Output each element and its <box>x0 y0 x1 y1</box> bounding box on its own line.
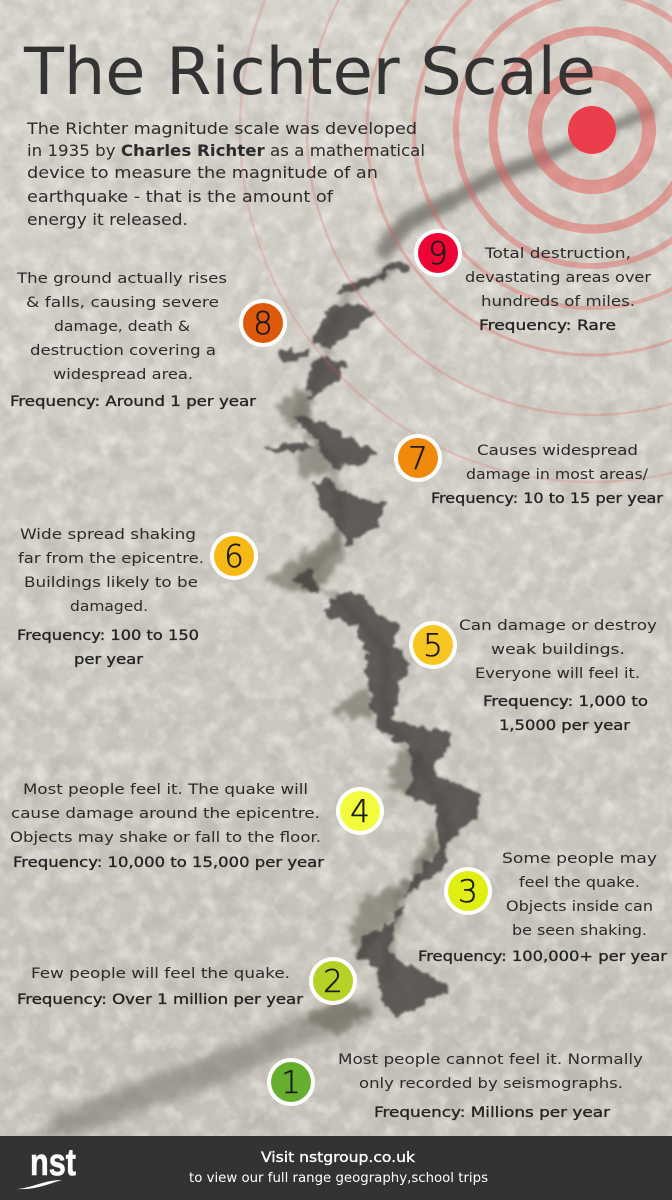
logo: nst: nst <box>30 1142 76 1184</box>
description 7: Frequency: 10 to 15 per year <box>431 491 663 507</box>
footer text <box>189 1150 488 1186</box>
badge 7 <box>394 434 442 482</box>
logo: nst <box>17 1142 76 1189</box>
description 4: cause damage around the epicentre. <box>11 806 320 822</box>
description 5 <box>459 618 657 734</box>
description 4: Most people feel it. The quake will <box>23 782 308 798</box>
footer bar <box>0 1136 672 1200</box>
description 5: weak buildings. <box>491 642 625 658</box>
badge 4: 4 <box>350 794 370 830</box>
description 9: devastating areas over <box>465 270 651 286</box>
badge 3 <box>444 867 492 915</box>
description 7: damage in most areas/ <box>466 467 648 483</box>
magnitude 1 <box>267 1052 643 1121</box>
description 5: Frequency: 1,000 to <box>483 694 648 710</box>
badge 8: 8 <box>253 306 273 342</box>
description 4: Frequency: 10,000 to 15,000 per year <box>13 855 324 871</box>
magnitude 4 <box>10 782 384 871</box>
crack in the concrete <box>36 112 650 1136</box>
description 8: widespread area. <box>53 367 193 383</box>
description 8: Frequency: Around 1 per year <box>10 394 256 410</box>
description 2: Few people will feel the quake. <box>31 966 290 982</box>
description 1: only recorded by seismographs. <box>359 1076 623 1092</box>
description 4: Objects may shake or fall to the floor. <box>10 830 321 846</box>
description 2: Frequency: Over 1 million per year <box>17 992 303 1008</box>
magnitude 8 <box>10 271 287 410</box>
icon: epicentre dot <box>568 106 616 154</box>
description 6: Wide spread shaking <box>20 527 196 543</box>
badge 9 <box>414 229 462 277</box>
description 9: Total destruction, <box>484 246 631 262</box>
description 5: Can damage or destroy <box>459 618 657 634</box>
description 8: & falls, causing severe <box>26 295 219 311</box>
magnitude 9 <box>414 229 651 334</box>
title: The Richter Scale <box>23 35 596 110</box>
badge 7: 7 <box>408 441 428 477</box>
intro text: earthquake - that is the amount of <box>27 187 333 206</box>
description 8 <box>10 271 256 410</box>
badge 5: 5 <box>423 628 443 664</box>
description 9: hundreds of miles. <box>481 294 635 310</box>
badge 6 <box>210 532 258 580</box>
description 3: feel the quake. <box>519 875 640 891</box>
description 3: Frequency: 100,000+ per year <box>418 949 667 965</box>
description 1 <box>338 1052 643 1121</box>
magnitude 7 <box>394 434 663 507</box>
intro text: device to measure the magnitude of an <box>27 163 378 182</box>
magnitude 5 <box>409 618 657 734</box>
intro text <box>26 119 425 229</box>
description 6: far from the epicentre. <box>18 551 204 567</box>
description 9: Frequency: Rare <box>479 318 616 334</box>
intro text: in 1935 by Charles Richter as a mathematical <box>27 141 425 160</box>
footer text: to view our full range geography,school trips <box>189 1171 488 1186</box>
magnitude 3 <box>418 851 667 965</box>
description 1: Most people cannot feel it. Normally <box>338 1052 643 1068</box>
badge 6: 6 <box>224 539 244 575</box>
description 3: Some people may <box>502 851 657 867</box>
description 3: Objects inside can <box>506 899 653 915</box>
description 6 <box>17 527 204 668</box>
description 6: Buildings likely to be <box>24 575 198 591</box>
badge 8 <box>239 299 287 347</box>
description 6: damaged. <box>70 599 148 615</box>
intro text: The Richter magnitude scale was developed <box>26 119 417 138</box>
bottom-left faded crack <box>36 996 380 1136</box>
badge 3: 3 <box>458 874 478 910</box>
dark crack shapes <box>266 262 480 1017</box>
magnitude 6 <box>17 527 258 668</box>
intro text: energy it released. <box>27 210 188 229</box>
top-right blurred streak <box>385 112 650 250</box>
description 2 <box>17 966 303 1008</box>
badge 5 <box>409 621 457 669</box>
badge 4 <box>336 787 384 835</box>
description 8: damage, death & <box>54 319 190 335</box>
description 5: Everyone will feel it. <box>475 666 640 682</box>
description 7 <box>431 443 663 507</box>
description 8: destruction covering a <box>30 343 216 359</box>
badge 1: 1 <box>281 1065 301 1101</box>
footer text: Visit nstgroup.co.uk <box>261 1150 416 1166</box>
badge 9: 9 <box>428 236 448 272</box>
description 6: per year <box>74 652 143 668</box>
magnitude 2 <box>17 957 357 1008</box>
description 1: Frequency: Millions per year <box>374 1105 610 1121</box>
description 3: be seen shaking. <box>512 923 647 939</box>
description 9 <box>465 246 651 334</box>
description 3 <box>418 851 667 965</box>
badge 2: 2 <box>323 964 343 1000</box>
epicentre rings <box>240 0 672 482</box>
description 4 <box>10 782 324 871</box>
badge 1 <box>267 1058 315 1106</box>
description 8: The ground actually rises <box>16 271 227 287</box>
description 6: Frequency: 100 to 150 <box>17 628 199 644</box>
crack underlay joining the fragments <box>300 268 450 980</box>
description 5: 1,5000 per year <box>499 718 630 734</box>
brown rubble edges <box>262 385 438 1035</box>
badge 2 <box>309 957 357 1005</box>
description 7: Causes widespread <box>477 443 638 459</box>
